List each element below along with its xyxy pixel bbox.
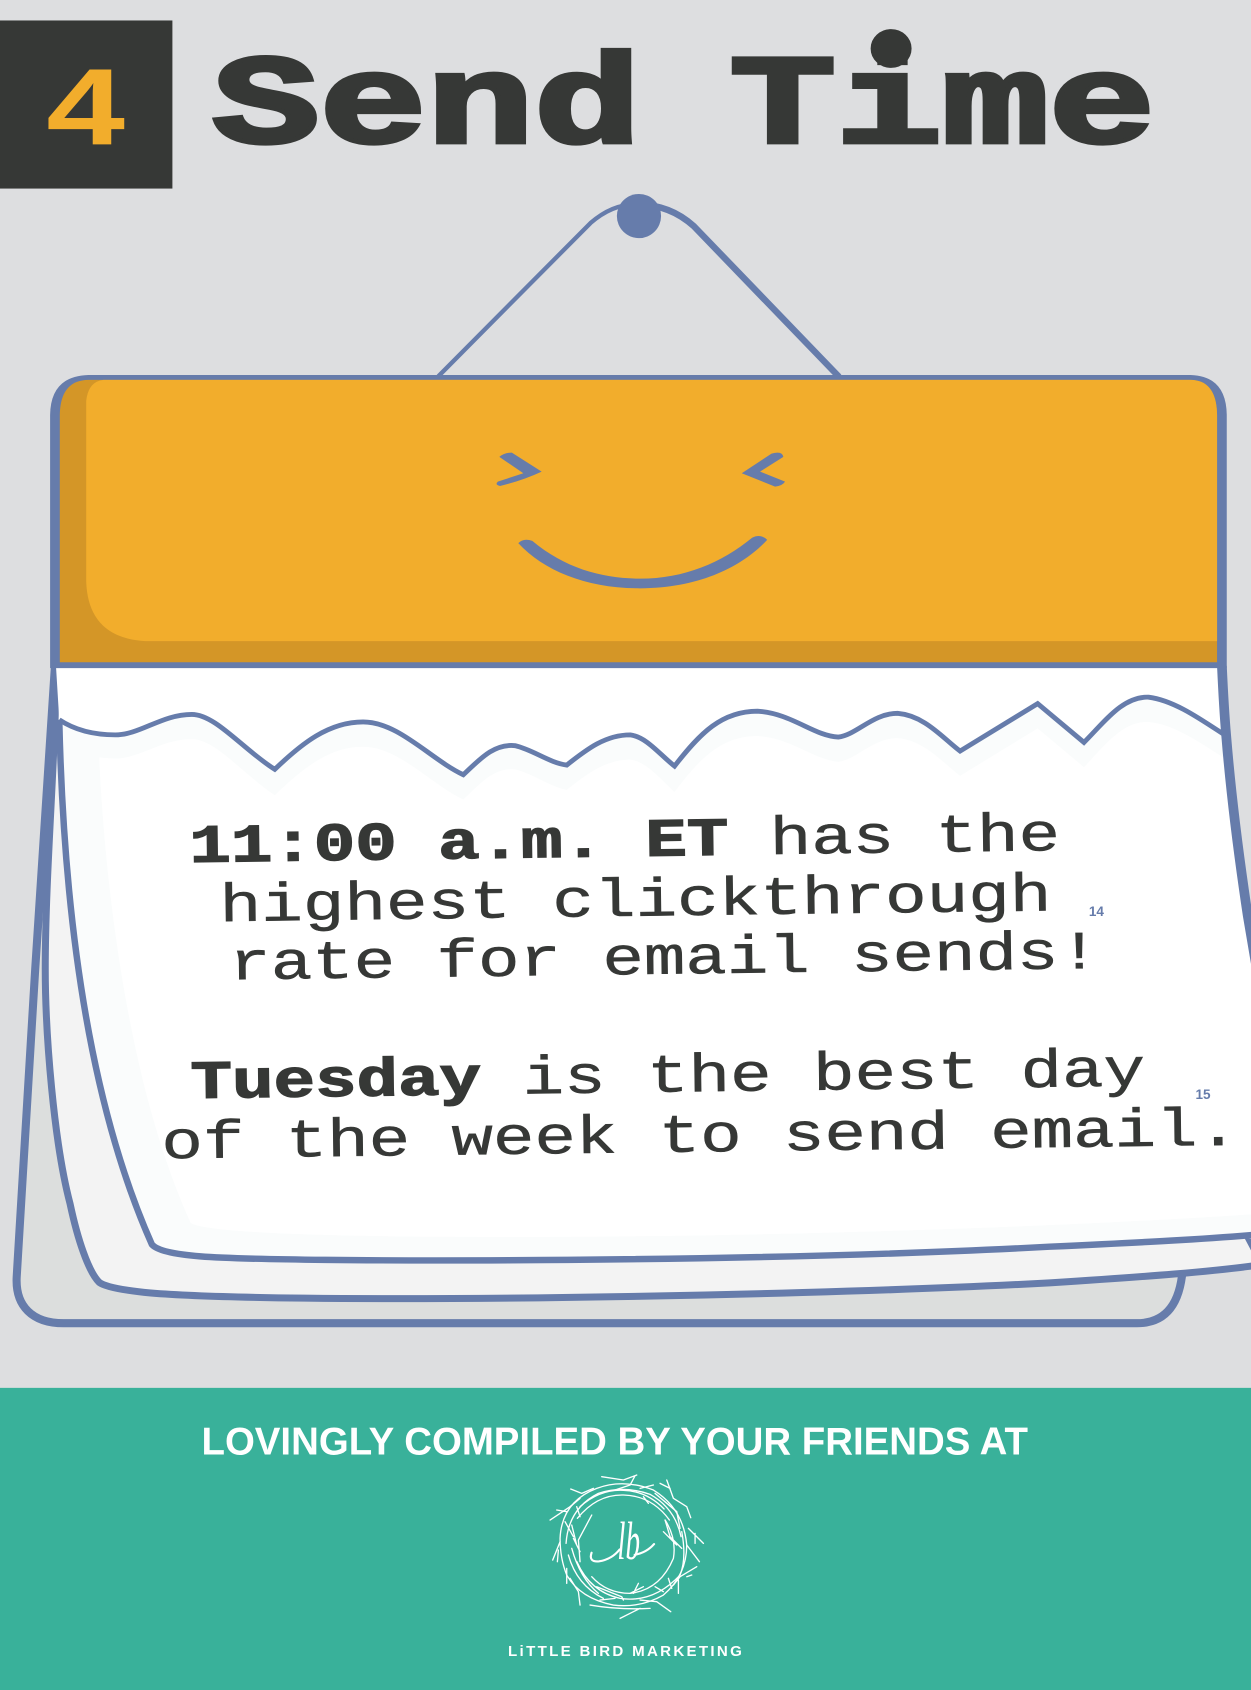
line 1: 11:00 a.m. ET has the [189,806,1060,879]
footnote 15: 15 [1196,1087,1211,1102]
page corner fold [1245,1238,1251,1259]
calendar top page [56,666,1251,1260]
page right outline [1222,666,1251,1024]
title: Time [729,37,1155,181]
page left and bottom outline [59,720,1251,1260]
right eye [742,453,785,487]
white inner page [99,722,1251,1237]
calendar middle page [45,690,1251,1299]
smiley face [497,453,785,588]
logo: wreath [550,1475,703,1618]
wreath rings [560,1484,687,1606]
number badge: 4 [46,46,125,168]
title: Send [212,37,641,181]
line 2: highest clickthrough [219,866,1052,938]
logo: monogram: lb [617,1511,640,1571]
logo: monogram [591,1511,654,1571]
calendar back page [17,666,1185,1323]
hanger string [439,205,838,376]
nail pin [617,194,661,238]
footer band [0,1388,1251,1690]
line 3: rate for email sends! [229,924,1100,996]
left eye [497,453,542,486]
wreath twigs [550,1475,703,1618]
number badge [0,20,172,189]
line 4: Tuesday is the best day [190,1042,1146,1115]
line 5: of the week to send email. [161,1101,1239,1175]
footnote 14: 14 [1089,904,1104,919]
logo: wordmark: LiTTLE BIRD MARKETING [508,1643,742,1660]
title [212,31,1155,181]
white torn strip [56,667,1226,775]
smile [518,536,767,588]
torn edge outline [59,697,1226,775]
monogram swash [591,1544,654,1561]
calendar header [50,375,1227,668]
footer heading: LOVINGLY COMPILED BY YOUR FRIENDS AT [201,1420,1028,1464]
calendar message text [161,806,1239,1175]
